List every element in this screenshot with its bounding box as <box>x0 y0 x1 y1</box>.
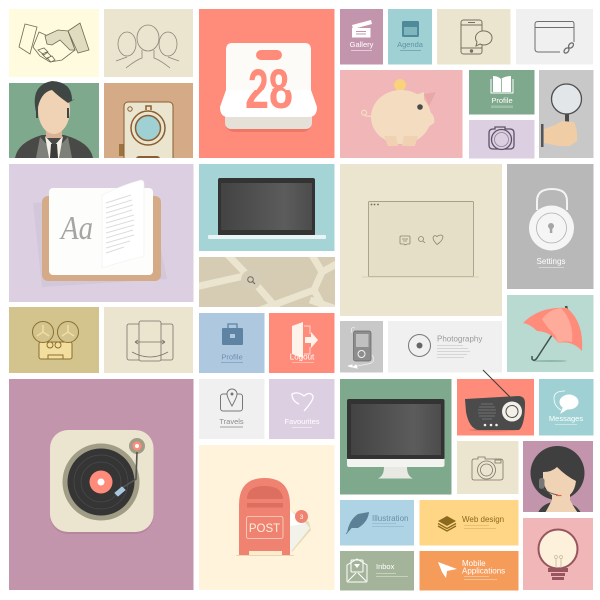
tile: woman with headset <box>523 441 593 513</box>
tile: profile blue: Profile <box>221 352 243 362</box>
tile: logout: Logout <box>290 352 315 362</box>
tile: man avatar <box>9 81 99 158</box>
tile: mobile applications: Mobile <box>462 559 486 568</box>
tile: piggy bank <box>340 70 462 158</box>
tile: profile blue <box>199 313 264 373</box>
tile: agenda: Agenda <box>397 40 424 49</box>
tile: reel to reel <box>9 307 99 373</box>
tile: magnifier and hand <box>539 70 594 158</box>
tile: calendar <box>199 9 334 158</box>
tile: handshake <box>9 9 99 77</box>
tile: messages <box>539 379 594 436</box>
tile: map <box>199 257 335 307</box>
tile: big browser window <box>340 164 502 316</box>
tile: travels: Travels <box>219 417 244 426</box>
tile: post box: POST <box>249 523 280 535</box>
tile: favourites <box>269 379 334 439</box>
tile: laptop <box>199 164 334 251</box>
tile: settings lock <box>507 164 594 289</box>
tile: post box: 3 <box>300 514 304 521</box>
date number: 28 <box>248 57 289 120</box>
date number: 28 <box>245 57 293 120</box>
tile: open book <box>9 164 194 302</box>
tile: gallery <box>340 9 383 64</box>
tile: browser link <box>516 9 593 64</box>
tile: people outline <box>104 9 193 77</box>
tile: travels <box>199 379 264 439</box>
tile: web design: Web design <box>462 515 504 524</box>
tile: illustration: Illustration <box>372 514 408 523</box>
tile: favourites: Favourites <box>284 417 320 426</box>
tile: logout <box>269 313 334 373</box>
tile: inbox: Inbox <box>376 562 395 571</box>
tile: rotating phones outline <box>104 307 193 373</box>
tile: radio <box>457 370 534 436</box>
tile: settings lock: Settings <box>537 257 565 266</box>
tile: agenda <box>388 9 432 64</box>
tile: post box <box>199 445 334 590</box>
tile: messages: Messages <box>549 414 583 423</box>
date number <box>246 69 292 108</box>
tile: gallery: Gallery <box>350 40 374 49</box>
tile: profile green: Profile <box>491 96 513 105</box>
tile: photography <box>388 321 502 372</box>
tile: retro camera <box>104 83 193 164</box>
tile: music player <box>340 321 383 372</box>
tile: camera beige <box>457 441 518 494</box>
window icons <box>400 235 443 245</box>
tile: profile green <box>469 70 534 114</box>
tile: photography: Photography <box>437 334 482 344</box>
tile: umbrella <box>507 295 594 372</box>
tile: turntable <box>9 379 194 590</box>
book title glyphs: Aa <box>59 210 93 247</box>
tile: inbox <box>340 551 414 590</box>
tile: light bulb <box>523 518 593 590</box>
tile: illustration <box>340 500 414 546</box>
tile: web design <box>420 500 518 546</box>
tile: phone chat <box>437 9 510 64</box>
tile: camera lilac <box>469 120 534 158</box>
tile: monitor <box>340 379 452 494</box>
tile: mobile applications <box>420 551 518 590</box>
tile: mobile applications: Applications <box>462 566 505 576</box>
